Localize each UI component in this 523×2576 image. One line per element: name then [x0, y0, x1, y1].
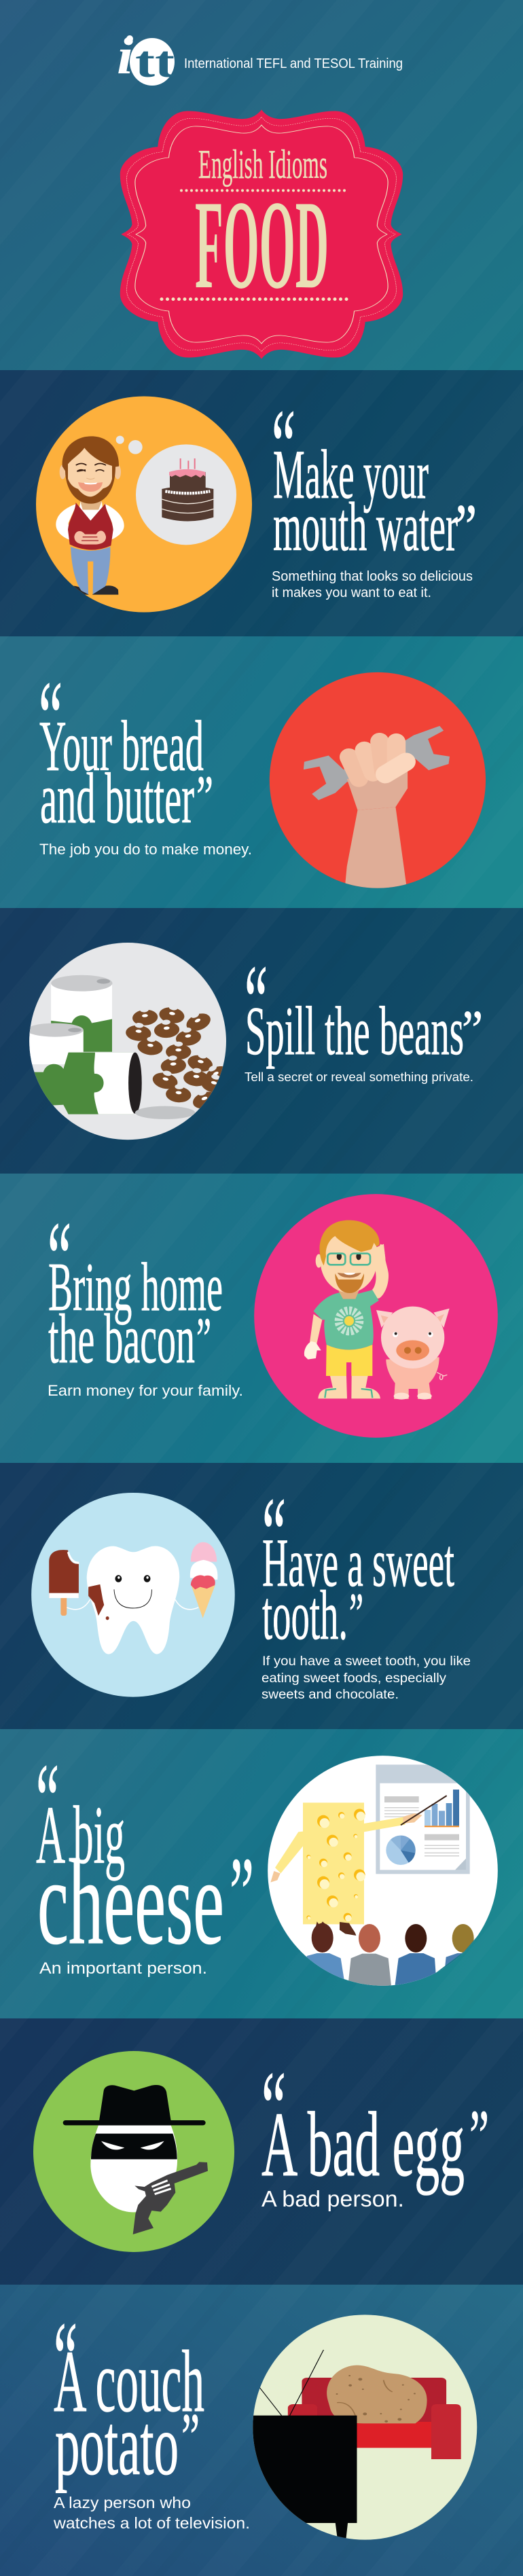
arms: [67, 1599, 198, 1610]
meaning: Tell a secret or reveal something private.: [245, 1070, 473, 1084]
second can: [26, 1023, 84, 1064]
idiom heading: and butter: [40, 759, 194, 838]
badge subtitle: English Idioms: [198, 142, 327, 187]
man: [56, 436, 124, 595]
arm: [344, 807, 408, 894]
idiom heading: [54, 2300, 204, 2493]
meaning: An important person.: [39, 1959, 207, 1978]
meaning: If you have a sweet tooth, you like: [262, 1654, 471, 1669]
title badge: [120, 109, 403, 359]
idiom heading: [272, 388, 477, 566]
meaning: Something that looks so delicious: [272, 569, 473, 584]
panel: header: [0, 0, 523, 370]
idiom heading: [48, 1200, 223, 1378]
idiom heading: “: [262, 1476, 286, 1593]
spilled beans: [126, 1007, 223, 1108]
audience: [307, 1922, 477, 1986]
revolver: [133, 2162, 208, 2234]
panel: have a sweet tooth: [0, 1463, 523, 1729]
tooth: [87, 1546, 179, 1654]
meaning: [53, 2494, 250, 2532]
idiom heading: ”: [196, 764, 213, 831]
mask: [91, 2134, 177, 2159]
meaning: watches a lot of television.: [53, 2514, 250, 2532]
logo tagline: International TEFL and TESOL Training: [184, 56, 403, 71]
couch: [288, 2378, 461, 2459]
illustration: potato on couch and TV: [247, 2315, 477, 2540]
badge shape: [120, 109, 403, 359]
wrench: [304, 726, 450, 800]
idiom heading: ”: [196, 1306, 211, 1373]
presentation board: [376, 1764, 470, 1874]
man: [304, 1220, 389, 1398]
idiom heading: [36, 1742, 254, 1970]
idiom heading: “: [39, 659, 62, 776]
logo: itt: tt: [135, 37, 175, 87]
panel: your bread and butter: [0, 636, 523, 908]
badge inner line: [135, 125, 388, 344]
idiom heading: ”: [462, 999, 483, 1061]
idiom heading: “: [272, 388, 295, 505]
meaning: A lazy person who: [54, 2494, 191, 2511]
idiom heading: “: [36, 1742, 59, 1859]
illustration: cans of beans: [26, 943, 232, 1140]
egg: [90, 2125, 177, 2212]
dotted rule bottom: [162, 297, 349, 301]
idiom heading: ”: [455, 491, 477, 563]
idiom heading: tooth.: [262, 1576, 348, 1654]
panel: spill the beans: [0, 908, 523, 1174]
meaning: [272, 569, 473, 600]
illustration: masked egg with gun: [33, 2051, 234, 2252]
dotted rule top: [181, 189, 345, 192]
pig: [376, 1307, 450, 1400]
idiom heading: [262, 2050, 489, 2196]
idiom heading: the bacon: [48, 1300, 195, 1378]
idiom heading: ”: [181, 2399, 200, 2476]
illustration: tooth with sweets: [31, 1493, 235, 1697]
illustration: man thinking of cake: [36, 397, 252, 612]
idiom heading: ”: [469, 2095, 489, 2179]
idiom heading: Your bread: [39, 706, 204, 786]
idiom heading: ”: [230, 1836, 254, 1953]
panel: a couch potato: [0, 2285, 523, 2576]
idiom heading: A couch: [54, 2333, 204, 2431]
potato: [327, 2365, 427, 2423]
idiom heading: Bring home: [48, 1249, 223, 1326]
fingers: [349, 742, 396, 778]
idiom heading: [262, 1476, 454, 1654]
cheese character: [270, 1796, 447, 1936]
meaning: it makes you want to eat it.: [272, 585, 431, 600]
meaning: Earn money for your family.: [48, 1382, 243, 1399]
idiom heading: A big: [36, 1790, 125, 1881]
television: [247, 2350, 357, 2540]
idiom heading: “: [262, 2050, 286, 2166]
ice cream: [190, 1542, 217, 1618]
hat: [63, 2085, 206, 2125]
idiom heading: “: [54, 2300, 77, 2417]
lying can: [26, 1053, 195, 1119]
panel: bring home the bacon: [0, 1174, 523, 1463]
meaning: [262, 1654, 471, 1702]
panel: a big cheese: [0, 1729, 523, 2018]
idiom heading: cheese: [37, 1834, 224, 1970]
panel: a bad egg: [0, 2018, 523, 2285]
illustration: fist holding wrench: [270, 672, 486, 894]
idiom heading: “: [245, 943, 268, 1060]
badge dashed line: [127, 117, 396, 352]
illustration: man and pig: [254, 1194, 498, 1438]
hand: [347, 769, 408, 810]
popsicle: [49, 1550, 79, 1616]
upright can: [51, 975, 113, 1052]
meaning: A bad person.: [262, 2186, 404, 2211]
idiom heading: “: [48, 1200, 71, 1317]
thumb: [385, 762, 406, 774]
logo: itt: [117, 28, 175, 87]
idiom heading: ”: [349, 1582, 363, 1648]
idiom heading: [245, 943, 483, 1070]
meaning: sweets and chocolate.: [262, 1688, 399, 1702]
meaning: eating sweet foods, especially: [262, 1671, 447, 1686]
panel: make your mouth water: [0, 370, 523, 636]
idiom heading: potato: [55, 2397, 179, 2493]
idiom heading: [39, 659, 213, 838]
thought bubble: [116, 436, 236, 545]
meaning: The job you do to make money.: [39, 841, 252, 858]
logo: itt: i: [117, 28, 133, 85]
illustration: cheese presenting: [268, 1756, 498, 1992]
cake: [162, 458, 213, 521]
